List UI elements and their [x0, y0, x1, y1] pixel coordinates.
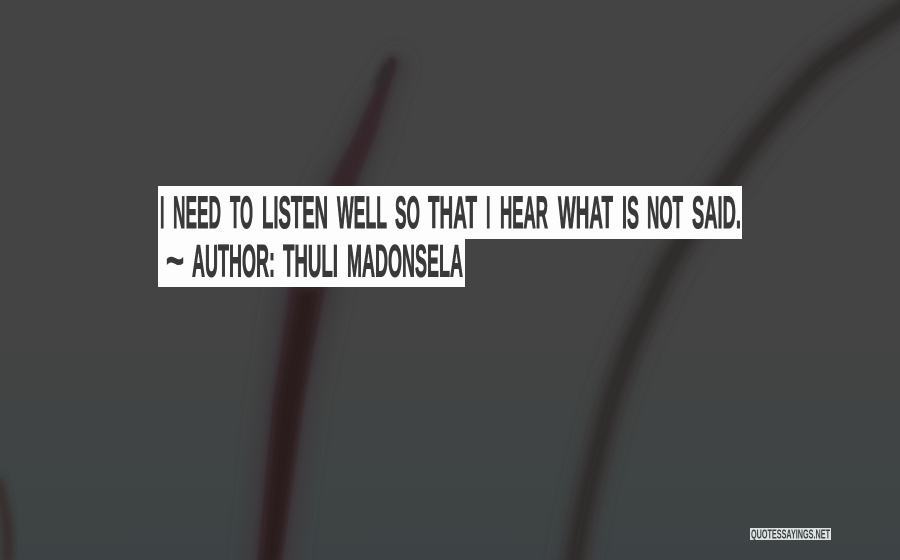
quote line: HEAR — [500, 187, 548, 238]
quote line: WELL — [337, 187, 387, 238]
quote line: IS — [622, 187, 639, 238]
quote line: I — [486, 187, 490, 238]
quote text panel — [158, 186, 742, 287]
quote line: TO — [230, 187, 253, 238]
white band: quote — [158, 186, 742, 239]
grass stem: right — [572, 0, 900, 560]
watermark — [750, 528, 831, 542]
white band: author — [158, 239, 465, 287]
quote line: NEED — [173, 187, 221, 238]
quote text panel: MADONSELA — [347, 236, 463, 286]
watermark: QUOTESSAYINGS.NET — [751, 528, 830, 542]
grass stem: centre — [240, 50, 410, 560]
author line: ~ — [166, 235, 184, 286]
quote line — [160, 187, 741, 238]
author line: THULI — [283, 236, 338, 286]
quote line: NOT — [647, 187, 683, 238]
quote line: SO — [395, 187, 420, 238]
grass stem: bottom left — [0, 478, 8, 560]
author line — [166, 235, 463, 286]
quote line: LISTEN — [262, 187, 328, 238]
quote line: I — [160, 187, 164, 238]
text: SAID. — [692, 187, 741, 238]
quote line: WHAT — [558, 187, 613, 238]
quote line: THAT — [428, 187, 477, 238]
author line: AUTHOR: — [192, 236, 275, 286]
